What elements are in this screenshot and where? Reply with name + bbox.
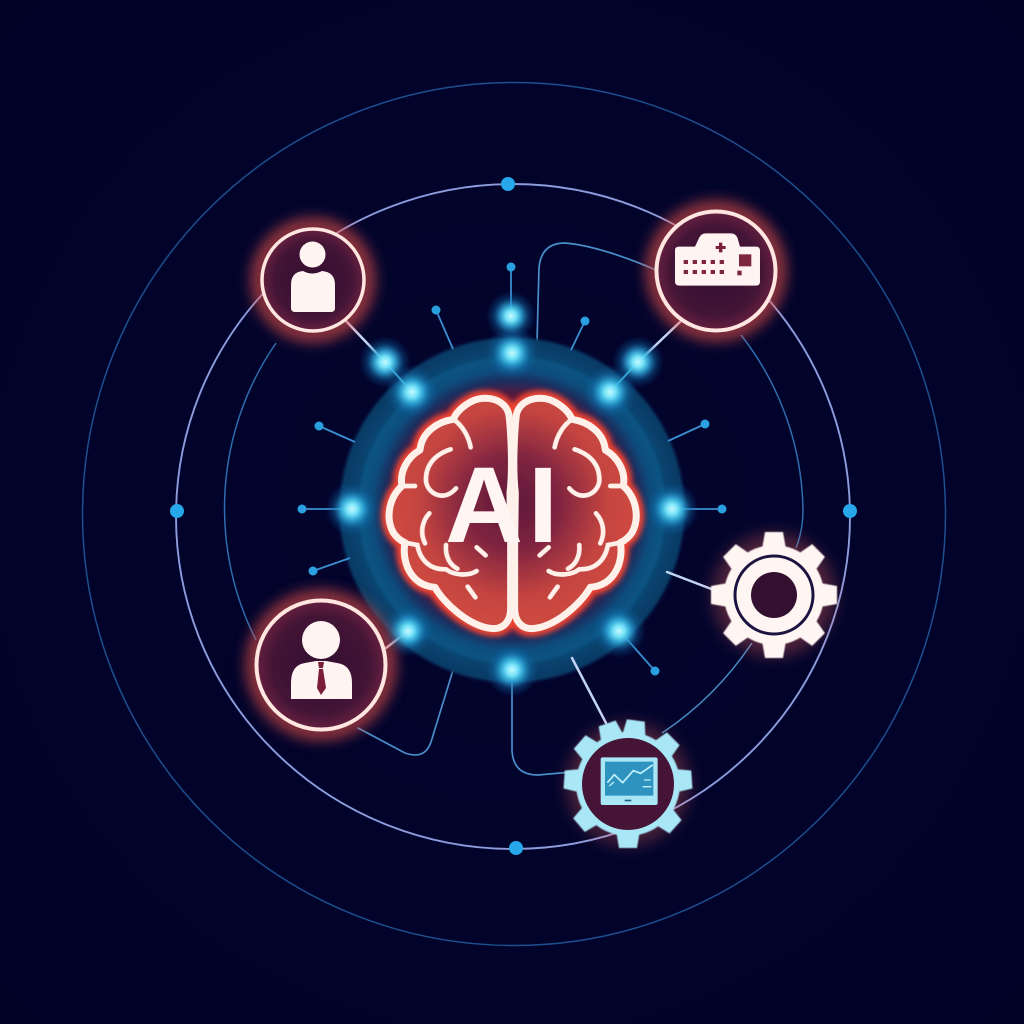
brain icon with AI label — [389, 398, 636, 629]
central blue halo disc — [337, 335, 687, 685]
orbit ring dots — [170, 177, 857, 855]
icon: monitor gear bottom right — [563, 719, 693, 848]
brain hemispheres — [389, 398, 636, 629]
AI label: AI — [445, 444, 558, 565]
monitor chart — [601, 757, 658, 805]
icon: hospital panel top right — [654, 209, 778, 333]
icon: person top left — [259, 226, 367, 334]
icon: white gear right — [711, 532, 837, 658]
outer orbit ring — [82, 82, 946, 946]
curved circuit connectors — [358, 243, 656, 775]
spoke lines with end dots — [298, 262, 726, 676]
middle orbit ring — [176, 184, 850, 849]
icon: business person bottom left — [254, 598, 388, 732]
brain glow — [389, 398, 636, 629]
brain folds — [402, 419, 623, 597]
bright icon connectors — [346, 321, 714, 723]
glowing network nodes — [325, 291, 699, 697]
inner orbit arcs — [224, 335, 803, 733]
